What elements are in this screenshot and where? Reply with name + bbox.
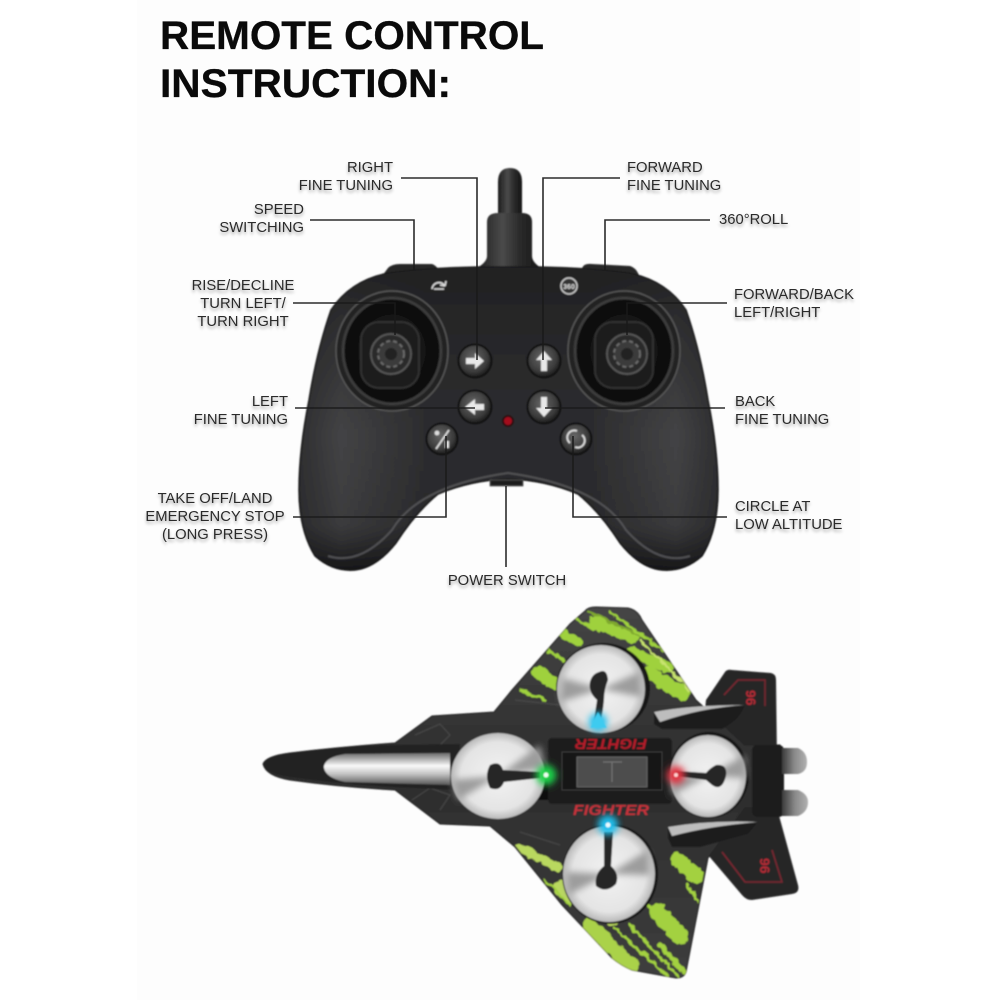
fighter text upper: FIGHTER	[574, 735, 647, 751]
label: 360 roll: 360°ROLL	[719, 212, 788, 228]
engine nozzles	[752, 745, 808, 817]
label: circle at low altitude: LOW ALTITUDE	[735, 517, 843, 533]
label: circle at low altitude: CIRCLE AT	[735, 499, 810, 515]
lower wing camouflage	[518, 848, 700, 976]
labels	[145, 160, 854, 589]
label: rise decline: TURN LEFT/	[200, 296, 287, 312]
top blue led	[589, 712, 607, 731]
top fan	[556, 643, 650, 733]
label: power switch: POWER SWITCH	[448, 573, 566, 589]
lower tail fin	[700, 790, 798, 900]
left fan	[451, 733, 548, 819]
green led	[536, 765, 556, 785]
upper tail fin	[700, 670, 777, 760]
antenna	[477, 168, 541, 275]
power switch slider	[490, 480, 523, 486]
label: take off land: TAKE OFF/LAND	[158, 491, 272, 507]
label: right fine tuning: FINE TUNING	[299, 178, 393, 194]
bottom fan	[562, 824, 658, 924]
right joystick	[568, 291, 680, 411]
label: speed switching: SPEED	[254, 202, 304, 218]
label: forward fine tuning: FINE TUNING	[627, 178, 721, 194]
nose cone	[263, 744, 460, 790]
red led	[667, 766, 685, 784]
battery hatch	[562, 752, 662, 790]
label: forward back left right: LEFT/RIGHT	[734, 305, 820, 321]
upper wing camouflage	[520, 612, 690, 700]
left shoulder button	[382, 264, 441, 284]
label: left fine tuning: FINE TUNING	[194, 412, 288, 428]
fighter text lower: FIGHTER	[573, 803, 650, 819]
title: INSTRUCTION:	[160, 62, 451, 106]
tail markings	[722, 680, 782, 882]
wing flaps	[654, 705, 758, 847]
left joystick	[336, 291, 448, 411]
icon: 360 roll	[561, 278, 577, 294]
title: REMOTE CONTROL	[160, 14, 544, 58]
title	[160, 14, 544, 106]
fighter drone	[263, 607, 808, 978]
background panel	[137, 0, 860, 1000]
remote controller	[299, 168, 718, 570]
arch rim of grip	[328, 473, 690, 558]
tail number lower: 96	[757, 858, 773, 874]
button: left fine tuning	[458, 390, 492, 424]
button: circle at low altitude	[560, 424, 592, 454]
indicator led	[503, 416, 513, 426]
controller body	[299, 267, 718, 570]
central body	[548, 738, 672, 804]
label: speed switching: SWITCHING	[219, 220, 304, 236]
tail number upper: 96	[743, 690, 759, 706]
label: forward fine tuning: FORWARD	[627, 160, 703, 176]
button: forward fine tuning	[528, 344, 560, 378]
icon: 360 roll: 360	[563, 284, 575, 291]
button: take off and land	[426, 424, 458, 454]
button: right fine tuning	[458, 344, 492, 378]
body shading	[299, 267, 718, 570]
right shoulder button	[582, 264, 640, 286]
label: left fine tuning: LEFT	[252, 394, 288, 410]
wing panel lines	[412, 700, 560, 845]
bottom blue led	[598, 815, 618, 835]
fuselage and wings	[263, 607, 780, 978]
label: rise decline: TURN RIGHT	[197, 314, 289, 330]
button: back fine tuning	[528, 390, 560, 424]
label: back fine tuning: BACK	[735, 394, 775, 410]
label: take off land: (LONG PRESS)	[162, 527, 268, 543]
label: right fine tuning: RIGHT	[347, 160, 393, 176]
right fan	[669, 732, 749, 818]
label: take off land: EMERGENCY STOP	[145, 509, 285, 525]
icon: speed mode	[432, 281, 446, 289]
label: back fine tuning: FINE TUNING	[735, 412, 829, 428]
label: forward back left right: FORWARD/BACK	[734, 287, 854, 303]
leader lines	[293, 178, 727, 567]
label: rise decline: RISE/DECLINE	[192, 278, 295, 294]
